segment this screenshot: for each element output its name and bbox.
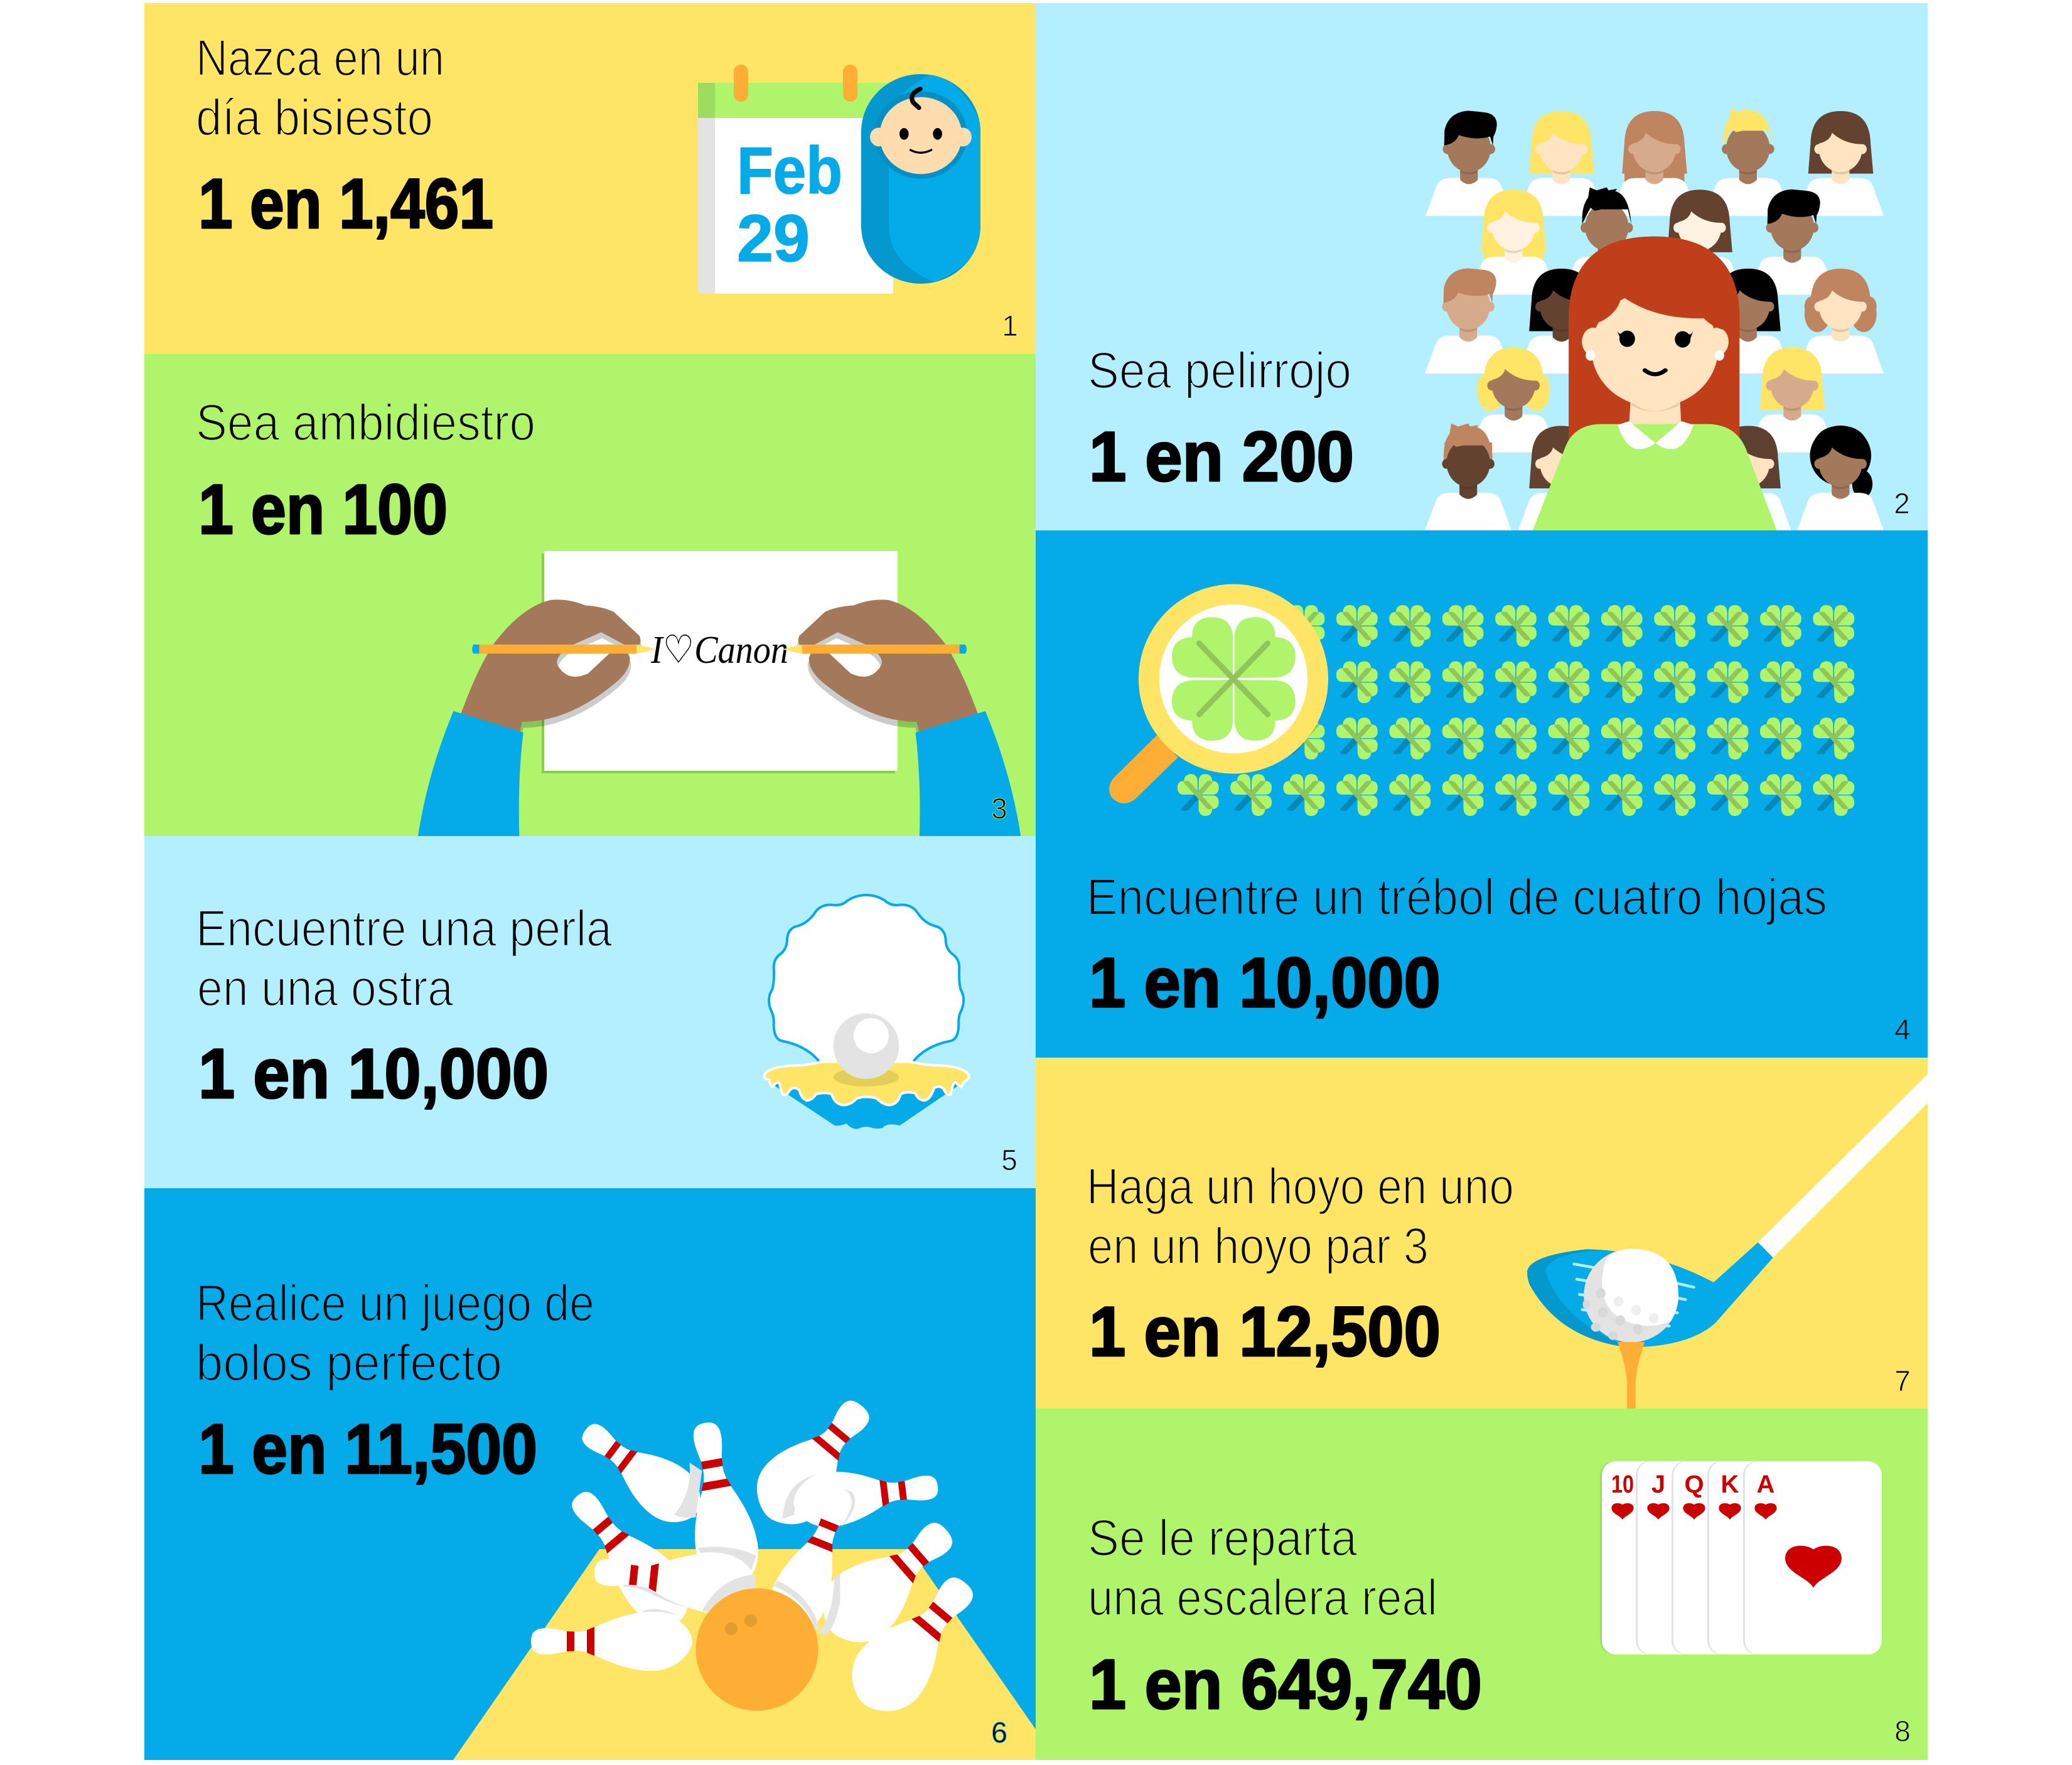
signature: I♡Canon [650, 629, 788, 672]
heading: Nazca en un [196, 30, 444, 87]
odds figure: 1 en 649,740 [1089, 1645, 1482, 1724]
panel: pearl [144, 836, 1036, 1188]
icon: playing cards: 10 [1611, 1471, 1634, 1498]
heading: Encuentre una perla [196, 900, 612, 957]
heading [196, 30, 444, 146]
footnote number: 8 [1894, 1715, 1911, 1747]
panel: four-leaf clover [1036, 530, 1928, 1058]
footnote number: 1 [1002, 309, 1018, 342]
heading: bolos perfecto [196, 1334, 502, 1392]
heading: Realice un juego de [196, 1275, 594, 1332]
panel: redhead [1036, 3, 1928, 531]
heading: en un hoyo par 3 [1088, 1218, 1429, 1275]
odds figure: 1 en 10,000 [1089, 943, 1441, 1022]
odds figure: 1 en 10,000 [198, 1034, 549, 1113]
heading: en una ostra [197, 960, 453, 1017]
odds figure: 1 en 1,461 [198, 164, 493, 243]
icon: calendar: 29 [737, 201, 810, 276]
footnote number: 6 [991, 1716, 1007, 1749]
panel: hole in one [1036, 1058, 1928, 1408]
icon: playing cards: J [1651, 1471, 1665, 1498]
heading [196, 1275, 594, 1392]
panel: royal flush [1036, 1408, 1928, 1760]
heading: una escalera real [1088, 1569, 1437, 1626]
icon: golf club, ball and tee [1527, 1074, 1928, 1408]
panel: leap day [144, 3, 1036, 354]
icon: playing cards: A [1757, 1471, 1774, 1498]
icon: playing cards: K [1721, 1471, 1739, 1498]
icon: calendar [698, 65, 893, 294]
panel: perfect bowling game [144, 1188, 1057, 1760]
icon: calendar: Feb [737, 134, 842, 208]
heading: Encuentre un trébol de cuatro hojas [1087, 869, 1827, 926]
heading [196, 900, 612, 1017]
bowling lane [453, 1549, 1057, 1760]
crowd of people [1425, 109, 1884, 531]
footnote number: 4 [1894, 1013, 1911, 1046]
footnote number: 2 [1894, 487, 1910, 520]
odds figure: 1 en 100 [198, 470, 448, 549]
icon: baby [861, 74, 981, 284]
icon: oyster with pearl [764, 895, 969, 1129]
icon: magnifying glass [1109, 584, 1328, 803]
paper sheet [542, 551, 898, 773]
icon: right hand with pencil [782, 599, 1021, 836]
panel: ambidextrous [144, 354, 1036, 836]
clover field [1178, 605, 1854, 816]
footnote number: 7 [1894, 1365, 1911, 1397]
icon: red-haired woman [1533, 237, 1777, 531]
odds figure: 1 en 12,500 [1089, 1292, 1441, 1371]
icon: left hand with pencil [418, 599, 657, 836]
icon: bowling pins and ball [531, 1383, 994, 1728]
odds figure: 1 en 11,500 [198, 1410, 537, 1488]
heading [1088, 1510, 1437, 1626]
heading: Sea ambidiestro [196, 394, 535, 451]
heading: día bisiesto [196, 89, 433, 146]
heading: Sea pelirrojo [1088, 342, 1351, 399]
odds figure: 1 en 200 [1089, 417, 1354, 496]
icon: playing cards: Q [1684, 1471, 1704, 1498]
footnote number: 3 [991, 792, 1007, 825]
footnote number: 5 [1001, 1144, 1017, 1176]
heading: Se le reparta [1088, 1510, 1357, 1567]
heading: Haga un hoyo en uno [1087, 1158, 1514, 1215]
heading [1087, 1158, 1514, 1275]
icon: playing cards [1600, 1461, 1882, 1655]
